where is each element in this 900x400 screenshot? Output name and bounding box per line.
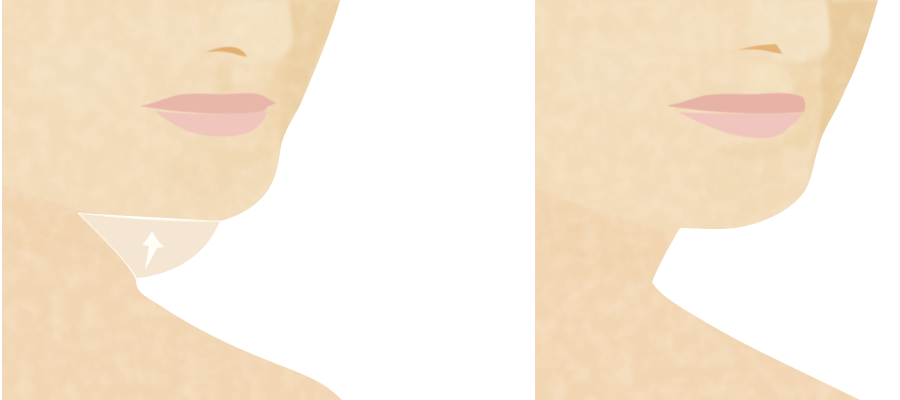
figure: after, face with slim jawline (530, 0, 885, 400)
side cheek shade (783, 61, 819, 149)
skin texture (530, 0, 880, 400)
face area (108, 2, 340, 221)
skin texture (0, 0, 345, 400)
nostril (205, 47, 247, 57)
upper lip (140, 93, 276, 114)
face area (675, 1, 878, 236)
nose highlight (260, 4, 293, 61)
outer cheek shade (813, 0, 878, 160)
neck and face skin, after (530, 0, 885, 400)
lower cheek shade (259, 76, 277, 158)
figure: before, face with sagging chin (0, 0, 345, 400)
philtrum highlight (748, 62, 790, 92)
highlight outline along the jaw and neck (78, 213, 220, 280)
philtrum shade (217, 66, 231, 92)
sagging fat highlighted area (78, 213, 220, 278)
icon: upward arrow (142, 231, 164, 270)
nostril (738, 44, 782, 54)
upper lip (668, 93, 805, 114)
chin dimple shade (724, 144, 778, 156)
outer cheek shade (279, 0, 340, 144)
lower lip (154, 111, 267, 136)
nose highlight (790, 2, 832, 60)
skin mottling (555, 35, 665, 105)
neck shadow (2, 195, 125, 265)
skin mottling (25, 35, 135, 105)
lower lip (678, 112, 803, 138)
neck and face skin, before (0, 0, 345, 400)
neck shadow (535, 195, 672, 275)
